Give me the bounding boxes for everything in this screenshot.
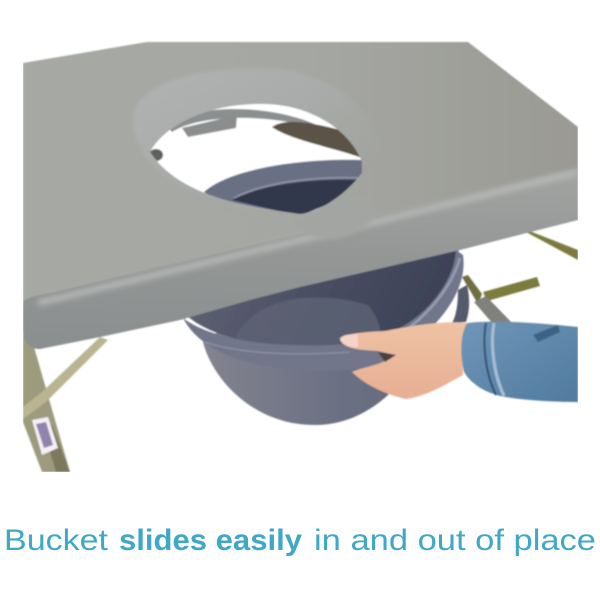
bucket interior [188, 250, 460, 344]
seat top surface [23, 42, 578, 305]
seat underside bracket [170, 108, 315, 132]
fingernail [340, 334, 358, 347]
bucket back lip [452, 285, 469, 323]
bolt stub [149, 149, 163, 161]
white opening with parts seen through [149, 104, 362, 216]
denim sleeve [461, 322, 578, 402]
hand gripping rim [340, 322, 467, 399]
caption: Bucket [4, 524, 109, 557]
photo: commode seat with bucket and hand [23, 42, 578, 472]
caption: in and out of place [314, 524, 596, 557]
barcode label [32, 417, 58, 455]
caption: slides easily [119, 524, 302, 557]
brace [23, 337, 108, 419]
bucket outer body [202, 332, 390, 426]
left folding leg with label [23, 335, 108, 472]
right legs and rods [462, 232, 578, 325]
seat edge highlight [38, 172, 578, 303]
bucket rim [183, 250, 464, 371]
finger shadow [378, 352, 396, 362]
seat front edge [23, 168, 578, 349]
brown strut [272, 122, 362, 158]
far rim of bucket [204, 160, 362, 216]
bucket under the seat [183, 240, 469, 425]
tongue of the seat cut-out [316, 222, 368, 236]
caption [4, 524, 596, 557]
seat hole bevel [134, 70, 298, 172]
